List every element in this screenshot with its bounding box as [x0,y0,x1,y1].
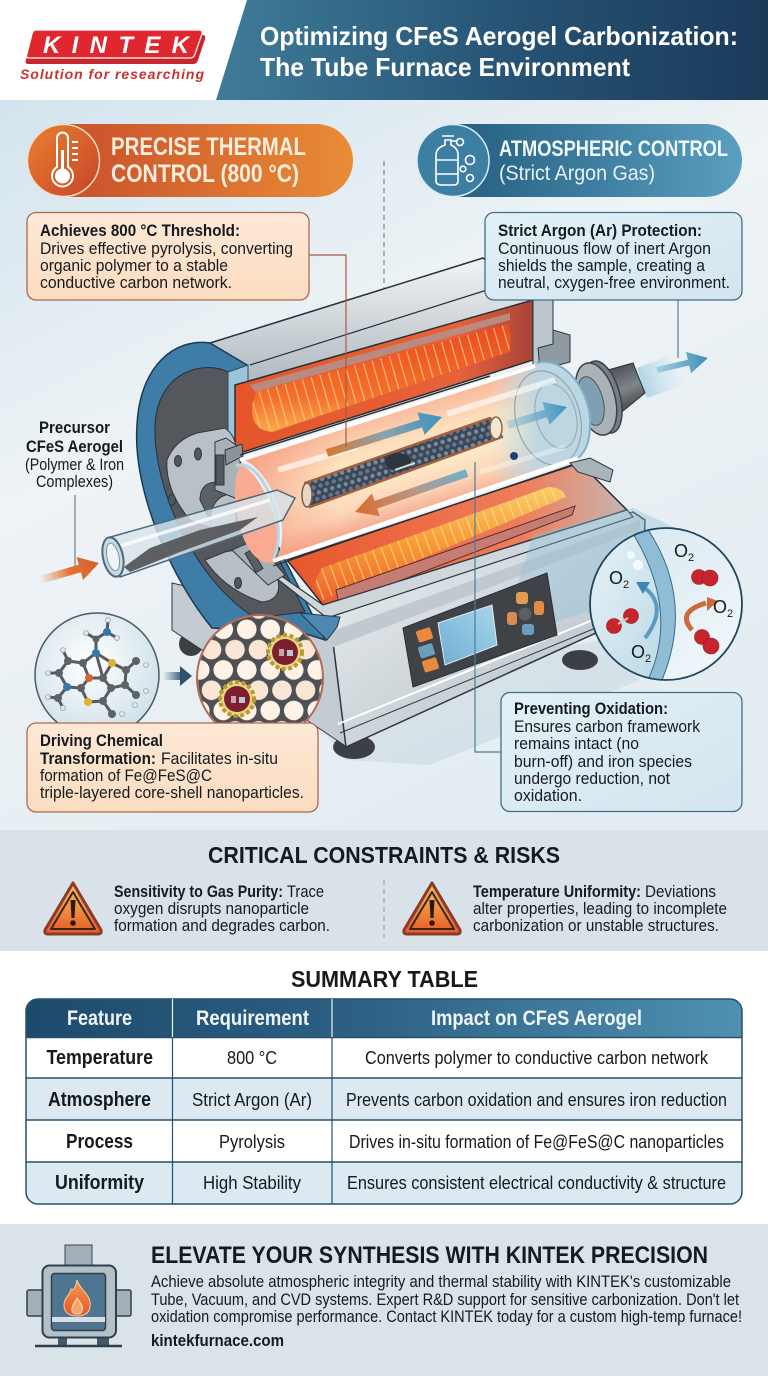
callout: preventing oxidation [501,692,742,812]
callout: strict argon protection: shields the sample, creating a [498,257,706,275]
text: temperature uniformity: carbonization or unstable structures. [473,917,719,935]
row: process [66,1130,724,1153]
table header row: Requirement [196,1007,309,1030]
oxygen molecules [606,570,719,654]
text: gas purity [114,883,330,935]
row: uniformity: High Stability [203,1172,302,1193]
text: gas purity: oxygen disrupts nanoparticle [114,900,309,918]
upper cavity [235,300,533,452]
callout: preventing oxidation: oxidation. [514,787,582,805]
lens: molecular precursor [35,613,159,737]
oxygen labels: 2 [727,608,733,620]
row: temperature [46,1046,709,1069]
arrow: precursor input [39,495,99,584]
label: precursor: Precursor [39,419,111,437]
furnace lid shell [210,258,535,392]
callout: driving chemical transformation: Facilitates in-situ [161,750,278,768]
nanoparticle [268,635,302,669]
panel: critical constraints and risks [0,830,768,951]
icon: warning triangle [404,883,460,934]
oxygen labels: O [713,597,727,617]
arrow: transformation [163,666,192,686]
gas flow arrows [326,352,708,516]
furnace shadow [300,640,640,765]
callout: preventing oxidation: Preventing Oxidation: [514,700,668,718]
callout: preventing oxidation: undergo reduction, not [514,770,670,788]
heading pill: precise thermal control [27,124,353,197]
callout: driving chemical transformation: Driving Chemical [40,732,163,750]
callout: strict argon protection: neutral, cxygen-free environment. [498,274,730,292]
oxygen labels: 2 [688,552,694,564]
callout: achieves 800 C threshold: organic polymer to a stable [40,257,228,275]
callout: achieves 800 C threshold: conductive carbon network. [40,274,232,292]
nanoparticle [220,682,254,716]
heading: summary table: SUMMARY TABLE [291,966,478,992]
text: gas purity: Sensitivity to Gas Purity: [114,883,283,901]
text: temperature uniformity [473,883,727,935]
callout: driving chemical transformation [27,723,318,812]
main background [0,100,768,830]
panel: call to action footer [0,1224,768,1376]
callout: strict argon protection: Strict Argon (Ar) Protection: [498,222,702,240]
furnace front lip [276,510,633,618]
row: atmosphere: Strict Argon (Ar) [192,1089,312,1110]
text: gas purity: Trace [287,883,324,901]
callout line: oxidation [475,462,501,752]
lower flange [205,540,285,602]
table header row: Impact on CFeS Aerogel [431,1007,642,1030]
row: temperature: Temperature [46,1046,153,1069]
precursor sample tube [99,490,295,579]
translucent beam to oxygen lens [500,508,680,640]
oxygen labels [609,541,733,665]
row: uniformity [55,1171,726,1194]
oxygen labels: 2 [623,579,629,591]
text: call to action body [151,1273,742,1326]
icon: gas bottle [436,136,474,185]
exhaust fitting [568,357,685,440]
left flange [167,428,243,530]
touchscreen [438,605,497,665]
callout: preventing oxidation: Ensures carbon framework [514,718,701,736]
text: temperature uniformity: Deviations [645,883,716,901]
callout: preventing oxidation: remains intact (no [514,735,639,753]
table header row: Feature [67,1007,132,1030]
callout: driving chemical transformation: formation of Fe@FeS@C [40,767,212,785]
callout: driving chemical transformation: triple-layered core-shell nanoparticles. [40,784,304,802]
row: atmosphere: Atmosphere [48,1088,151,1111]
link: website: kintekfurnace.com [151,1331,284,1350]
arrow: oxygen deflected right [686,597,718,630]
upper heating coil [252,324,512,432]
logo: Solution for researching [20,66,204,82]
label: precursor [25,419,124,491]
callout: achieves 800 C threshold: Drives effective pyrolysis, converting [40,240,293,258]
blue corner [228,365,248,460]
lower cavity [287,463,627,605]
row: temperature: Converts polymer to conductive carbon network [365,1047,709,1068]
glass process tube [235,362,591,566]
table header row [67,1007,642,1030]
label: precursor: CFeS Aerogel [26,438,123,456]
label: precursor: (Polymer & Iron [25,456,124,474]
icon: warning triangle [45,883,101,934]
furnace base [172,512,645,747]
oxygen labels: O [674,541,688,561]
heading pill: atmospheric control: (Strict Argon Gas) [499,161,655,185]
row: process: Process [66,1130,133,1153]
oxygen labels: O [609,568,623,588]
icon: thermometer [52,132,78,186]
callout: driving chemical transformation: Transformation: [40,750,156,768]
control panel [403,573,557,687]
blue end rim [137,342,325,640]
title: Optimizing CFeS Aerogel Carbonization: [260,21,738,51]
icon: furnace [27,1245,131,1346]
oxygen labels: O [631,642,645,662]
row: atmosphere [48,1088,727,1111]
logo [20,30,205,82]
callout line: argon [677,300,679,358]
text: temperature uniformity: Temperature Uniformity: [473,883,641,901]
row: temperature: 800 °C [227,1047,277,1068]
panel: summary [0,951,768,1224]
furnace illustration [99,258,708,765]
lens: carbon lattice with nanoparticles [196,614,324,722]
panel buttons [415,592,544,673]
arrow: oxygen deflected left [636,582,657,638]
text: gas purity: formation and degrades carbon. [114,917,330,935]
row: uniformity: Uniformity [55,1171,145,1194]
dark end disc [155,367,305,618]
row: uniformity: Ensures consistent electrical conductivity & structure [347,1172,726,1193]
summary table [26,999,742,1204]
callout line: thermal [309,255,346,447]
callout: strict argon protection: Continuous flow of inert Argon [498,240,711,258]
callout: achieves 800 C threshold [27,212,309,300]
title: The Tube Furnace Environment [260,52,630,82]
aerogel nanotube sample [302,417,502,507]
callout: preventing oxidation: burn-off) and iron species [514,753,692,771]
label: precursor: Complexes) [36,473,113,491]
logo: KINTEK [43,32,191,59]
heading: constraints: CRITICAL CONSTRAINTS & RISKS [208,842,560,868]
text: temperature uniformity: alter properties, leading to incomplete [473,900,727,918]
header [0,0,768,100]
furnace feet [179,632,598,759]
row: process: Pyrolysis [219,1131,285,1152]
lens: oxygen barrier [590,528,742,680]
callout: strict argon protection [485,212,742,300]
divider line: center dashed [383,161,385,423]
heading pill: atmospheric control [417,124,742,197]
oxygen labels: 2 [645,653,651,665]
title [260,21,738,82]
heading pill: precise thermal control: CONTROL (800 °C) [111,160,299,188]
heading pill: precise thermal control: PRECISE THERMAL [111,133,306,161]
lower heating coil [316,487,575,604]
callout: achieves 800 C threshold: Achieves 800 °C Threshold: [40,222,240,240]
